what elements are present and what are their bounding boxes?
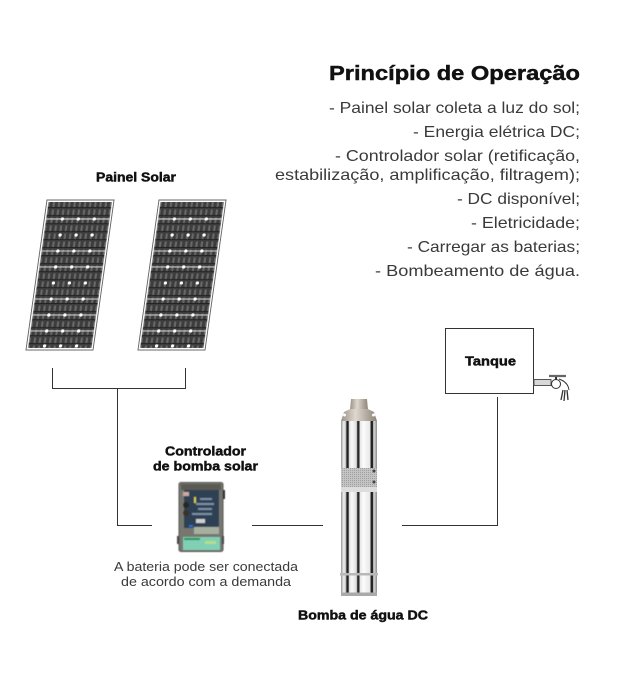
- label: tank: Tanque: [465, 354, 516, 368]
- connector: controller to pump: [252, 524, 323, 526]
- heading: controller: de bomba solar: [153, 460, 258, 474]
- text block: operating steps: - Painel solar coleta a luz do sol;: [329, 100, 580, 117]
- heading: pump: Bomba de água DC: [298, 608, 428, 622]
- icon: faucet: [534, 376, 569, 401]
- note: battery: de acordo com a demanda: [121, 575, 291, 589]
- text block: operating steps: [275, 100, 580, 280]
- text block: operating steps: - Controlador solar (retificação,: [335, 148, 580, 165]
- icon: solar panel left: [26, 200, 114, 350]
- connector: pump to tank: [402, 397, 498, 526]
- heading: solar panel: Painel Solar: [96, 170, 176, 184]
- heading: controller: Controlador: [165, 444, 246, 458]
- icon: solar pump controller: [177, 482, 225, 552]
- text block: operating steps: estabilização, amplificação, filtragem);: [275, 167, 580, 184]
- note: battery: A bateria pode ser conectada: [114, 560, 298, 574]
- text block: operating steps: - Carregar as baterias;: [407, 239, 580, 256]
- icon: solar panel right: [138, 200, 226, 350]
- text block: operating steps: - Energia elétrica DC;: [413, 124, 580, 141]
- icon: DC water pump: [340, 399, 378, 596]
- text block: operating steps: - DC disponível;: [457, 191, 580, 208]
- heading: controller: [153, 444, 258, 474]
- text block: operating steps: - Bombeamento de água.: [375, 263, 580, 280]
- note: battery: [114, 560, 298, 589]
- text block: operating steps: - Eletricidade;: [471, 215, 580, 232]
- title: Princípio de Operação: [329, 62, 580, 85]
- connector: panels to controller: [52, 368, 186, 526]
- panel: tank: [446, 328, 534, 394]
